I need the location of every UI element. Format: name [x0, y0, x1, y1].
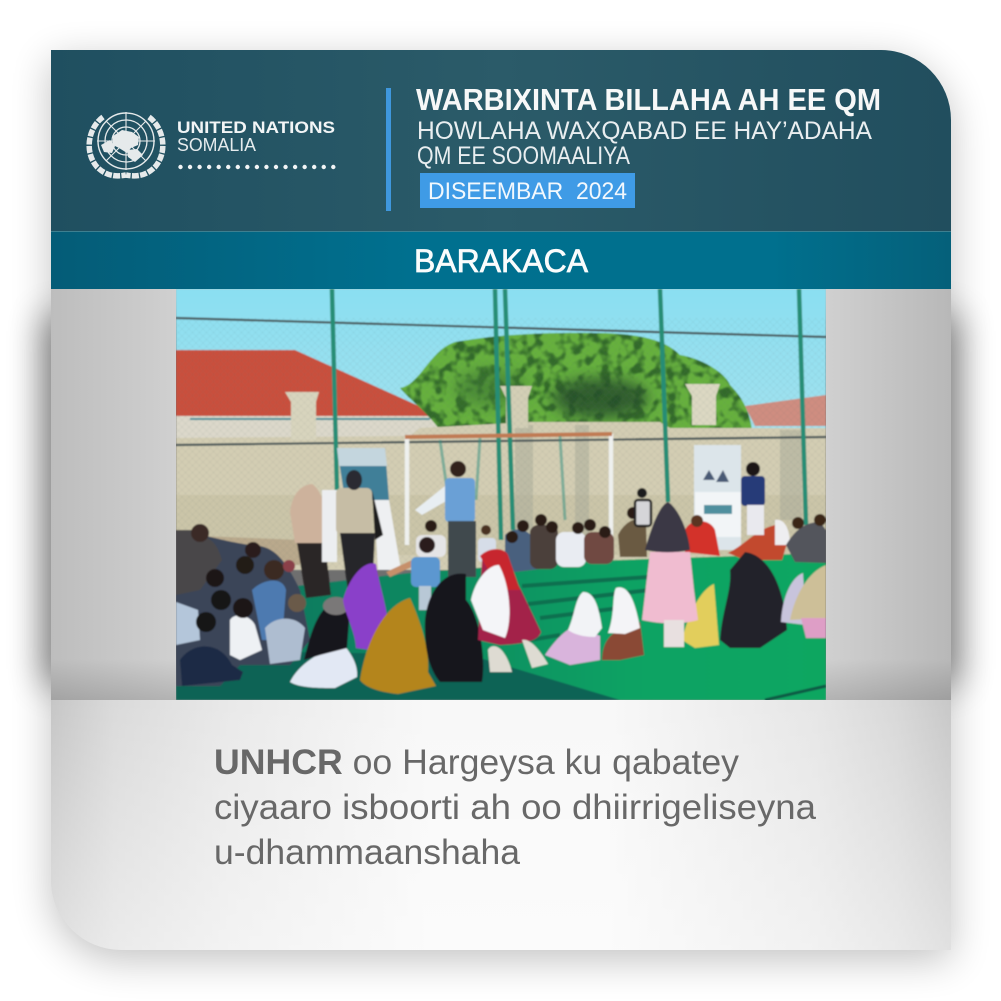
red roof: [176, 350, 432, 418]
panel: grey photo band left: [51, 289, 176, 700]
right banner: Play and Interact: [694, 445, 741, 550]
back row of seated children: [505, 488, 826, 572]
goal frame: [407, 434, 611, 548]
caption text: [214, 742, 816, 872]
girl in white sitting: [290, 597, 357, 688]
sky: [176, 289, 826, 429]
logo text: United Nations: UNITED NATIONS: [177, 119, 335, 137]
concrete wall: [176, 422, 826, 570]
fence poles: [332, 289, 806, 540]
woman in beige with pink skirt: [790, 565, 826, 638]
girl in pink dress with black veil: [642, 502, 698, 647]
woman in vest with black skirt: [322, 470, 383, 592]
building wall: [176, 414, 438, 438]
staff member in blue vest: [415, 461, 476, 577]
logo: United Nations Somalia: [89, 112, 335, 176]
woman in purple hijab: [343, 563, 388, 650]
child in white hijab and brown skirt: [602, 587, 644, 660]
children by the goal: [416, 520, 496, 562]
panel: grey photo band right: [826, 289, 951, 700]
pitch shadow stripes: [522, 577, 650, 640]
subheading line 1: HOWLAHA WAXQABAD EE HAY’ADAHA: [417, 117, 872, 145]
woman in black hijab right: [720, 552, 787, 648]
child in lilac hijab: [781, 573, 806, 625]
foreground shade: [176, 650, 620, 700]
band shadow: [42, 315, 960, 685]
foreground shadow streak: [765, 686, 826, 700]
icon: UN emblem: [89, 112, 163, 176]
tree: [400, 333, 752, 430]
heading: section title: BARAKACA: [414, 243, 589, 279]
standing boy in blue: [741, 462, 765, 535]
date badge: DISEEMBAR 2024: [428, 178, 627, 205]
left group of seated children: [176, 524, 310, 686]
distant roof: [745, 395, 826, 426]
boy reaching in blue shirt: [386, 537, 440, 610]
photo: children seated on a sports pitch: [176, 289, 826, 700]
band bottom shading: [51, 289, 951, 700]
woman in black hijab: [425, 573, 483, 682]
woman in mustard hijab: [360, 598, 436, 694]
woman in crimson dress with red scarf: [471, 549, 548, 672]
panel: header background: [51, 50, 951, 232]
caption line 2: ciyaaro isboorti ah oo dhiirrigeliseyna: [214, 787, 816, 827]
logo text: Somalia: SOMALIA: [177, 135, 256, 155]
left banner: [337, 448, 401, 570]
child in white hijab and lilac: [545, 592, 602, 665]
woman in beige with long skirt: [290, 484, 331, 598]
fence rails: [176, 318, 826, 445]
caption line 3: u-dhammaanshaha: [214, 832, 520, 872]
panel: caption background: [51, 700, 951, 950]
dotted rule: [180, 165, 335, 169]
gate pillars: [285, 392, 319, 440]
heading: report title: WARBIXINTA BILLAHA AH EE QM: [416, 82, 881, 117]
caption line 1: UNHCR oo Hargeysa ku qabatey: [214, 742, 739, 782]
vertical accent divider: [386, 88, 391, 211]
panel: section bar: [51, 232, 951, 289]
child in yellow: [682, 584, 719, 648]
subheading line 2: QM EE SOOMAALIYA: [417, 142, 630, 170]
chain-link mesh: [176, 318, 826, 568]
green pitch: [298, 553, 826, 700]
